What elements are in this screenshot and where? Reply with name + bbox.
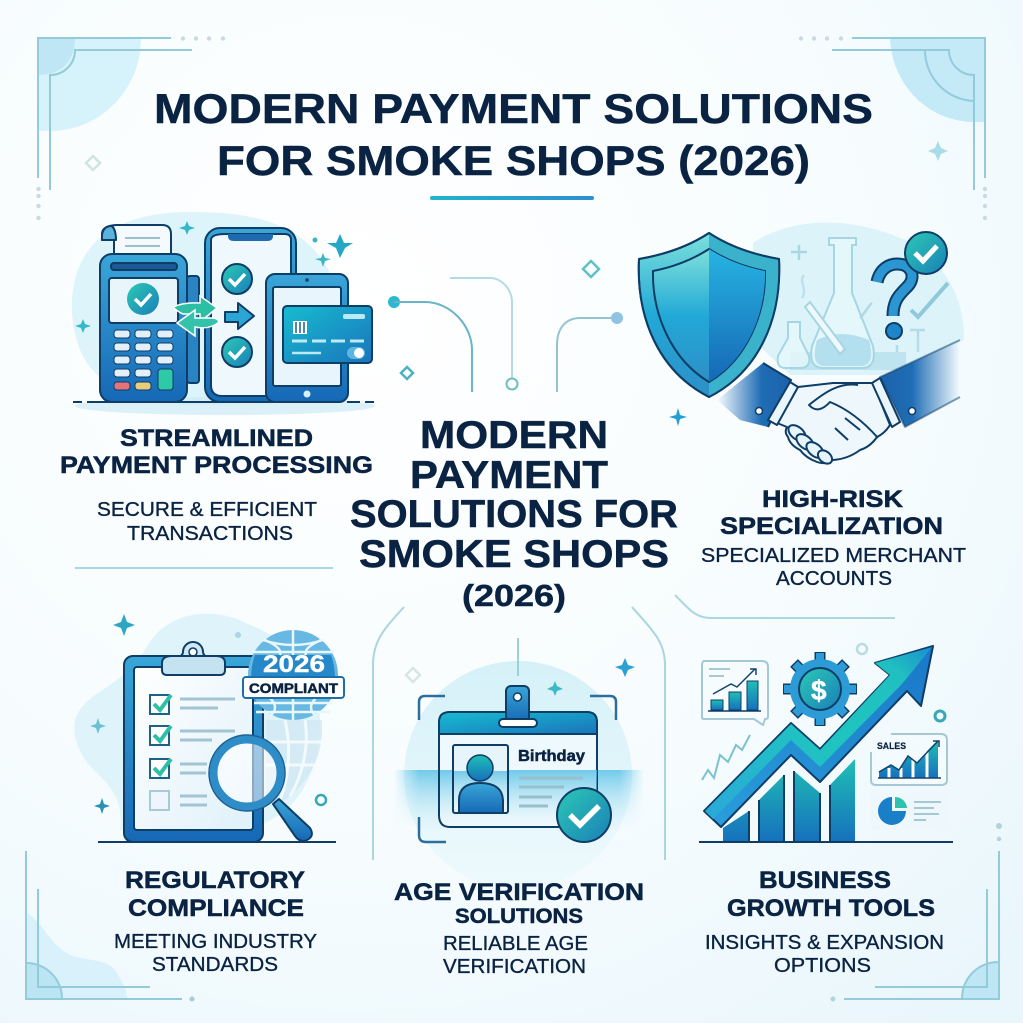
description [443, 933, 588, 978]
panel: business growth tools [699, 644, 953, 977]
heading [727, 867, 935, 922]
description: SECURE & EFFICIENT [97, 499, 317, 521]
icon: growth arrow, gear and charts [699, 644, 953, 842]
central heading: MODERN [420, 414, 608, 457]
central heading: PAYMENT [410, 454, 608, 497]
heading: BUSINESS [759, 867, 891, 894]
heading [394, 879, 644, 928]
central heading [350, 414, 678, 613]
heading: SPECIALIZATION [720, 513, 943, 540]
description [701, 545, 966, 590]
heading [720, 486, 943, 540]
corner frame: top left [36, 36, 225, 220]
panel: high-risk specialization [639, 223, 966, 590]
central heading: SMOKE SHOPS [359, 533, 669, 576]
corner frame: top right [799, 36, 987, 220]
icon: clipboard, magnifier and compliance globe [74, 614, 344, 842]
description: SPECIALIZED MERCHANT [701, 545, 966, 567]
icon: clipboard, magnifier and compliance globe: 2026 [263, 651, 325, 678]
icon: payment terminal, phone, tablet and card [72, 212, 375, 415]
connector lines [75, 278, 895, 860]
panel: age verification solutions [394, 638, 644, 978]
panel: streamlined payment processing [60, 212, 375, 545]
title [154, 85, 873, 184]
icon: growth arrow, gear and charts: $ [811, 675, 827, 706]
heading: PAYMENT PROCESSING [60, 452, 373, 479]
heading: COMPLIANCE [128, 895, 304, 922]
description: RELIABLE AGE [443, 933, 588, 955]
central heading: SOLUTIONS FOR [350, 493, 678, 536]
icon: growth arrow, gear and charts: SALES [877, 741, 906, 751]
description: MEETING INDUSTRY [114, 931, 317, 953]
title: MODERN PAYMENT SOLUTIONS [154, 85, 873, 132]
corner frame: bottom right [830, 823, 1002, 1002]
description: TRANSACTIONS [127, 523, 293, 545]
icon: ID badge with check: Birthday [518, 748, 585, 765]
heading: STREAMLINED [120, 425, 313, 452]
description [114, 931, 317, 976]
panel: regulatory compliance [74, 614, 344, 976]
description: INSIGHTS & EXPANSION [705, 932, 944, 954]
heading: SOLUTIONS [455, 905, 583, 928]
description: OPTIONS [774, 955, 871, 977]
heading: REGULATORY [125, 867, 305, 894]
description [705, 932, 944, 977]
heading: AGE VERIFICATION [394, 879, 644, 906]
heading: GROWTH TOOLS [727, 895, 935, 922]
heading [60, 425, 373, 479]
icon: clipboard, magnifier and compliance globe: COMPLIANT [249, 681, 339, 696]
title underline [430, 196, 594, 200]
heading [125, 867, 305, 922]
corner frame: bottom left [26, 851, 194, 1002]
title: FOR SMOKE SHOPS (2026) [217, 137, 810, 184]
icon: ID badge with check [394, 638, 644, 889]
description: STANDARDS [152, 954, 278, 976]
description: ACCOUNTS [776, 568, 892, 590]
central heading: (2026) [462, 578, 566, 613]
description: VERIFICATION [443, 956, 586, 978]
icon: shield, lab glass and handshake [639, 223, 964, 466]
description [97, 499, 317, 545]
decorative sparkles in the centre [401, 261, 599, 379]
heading: HIGH-RISK [762, 486, 904, 513]
